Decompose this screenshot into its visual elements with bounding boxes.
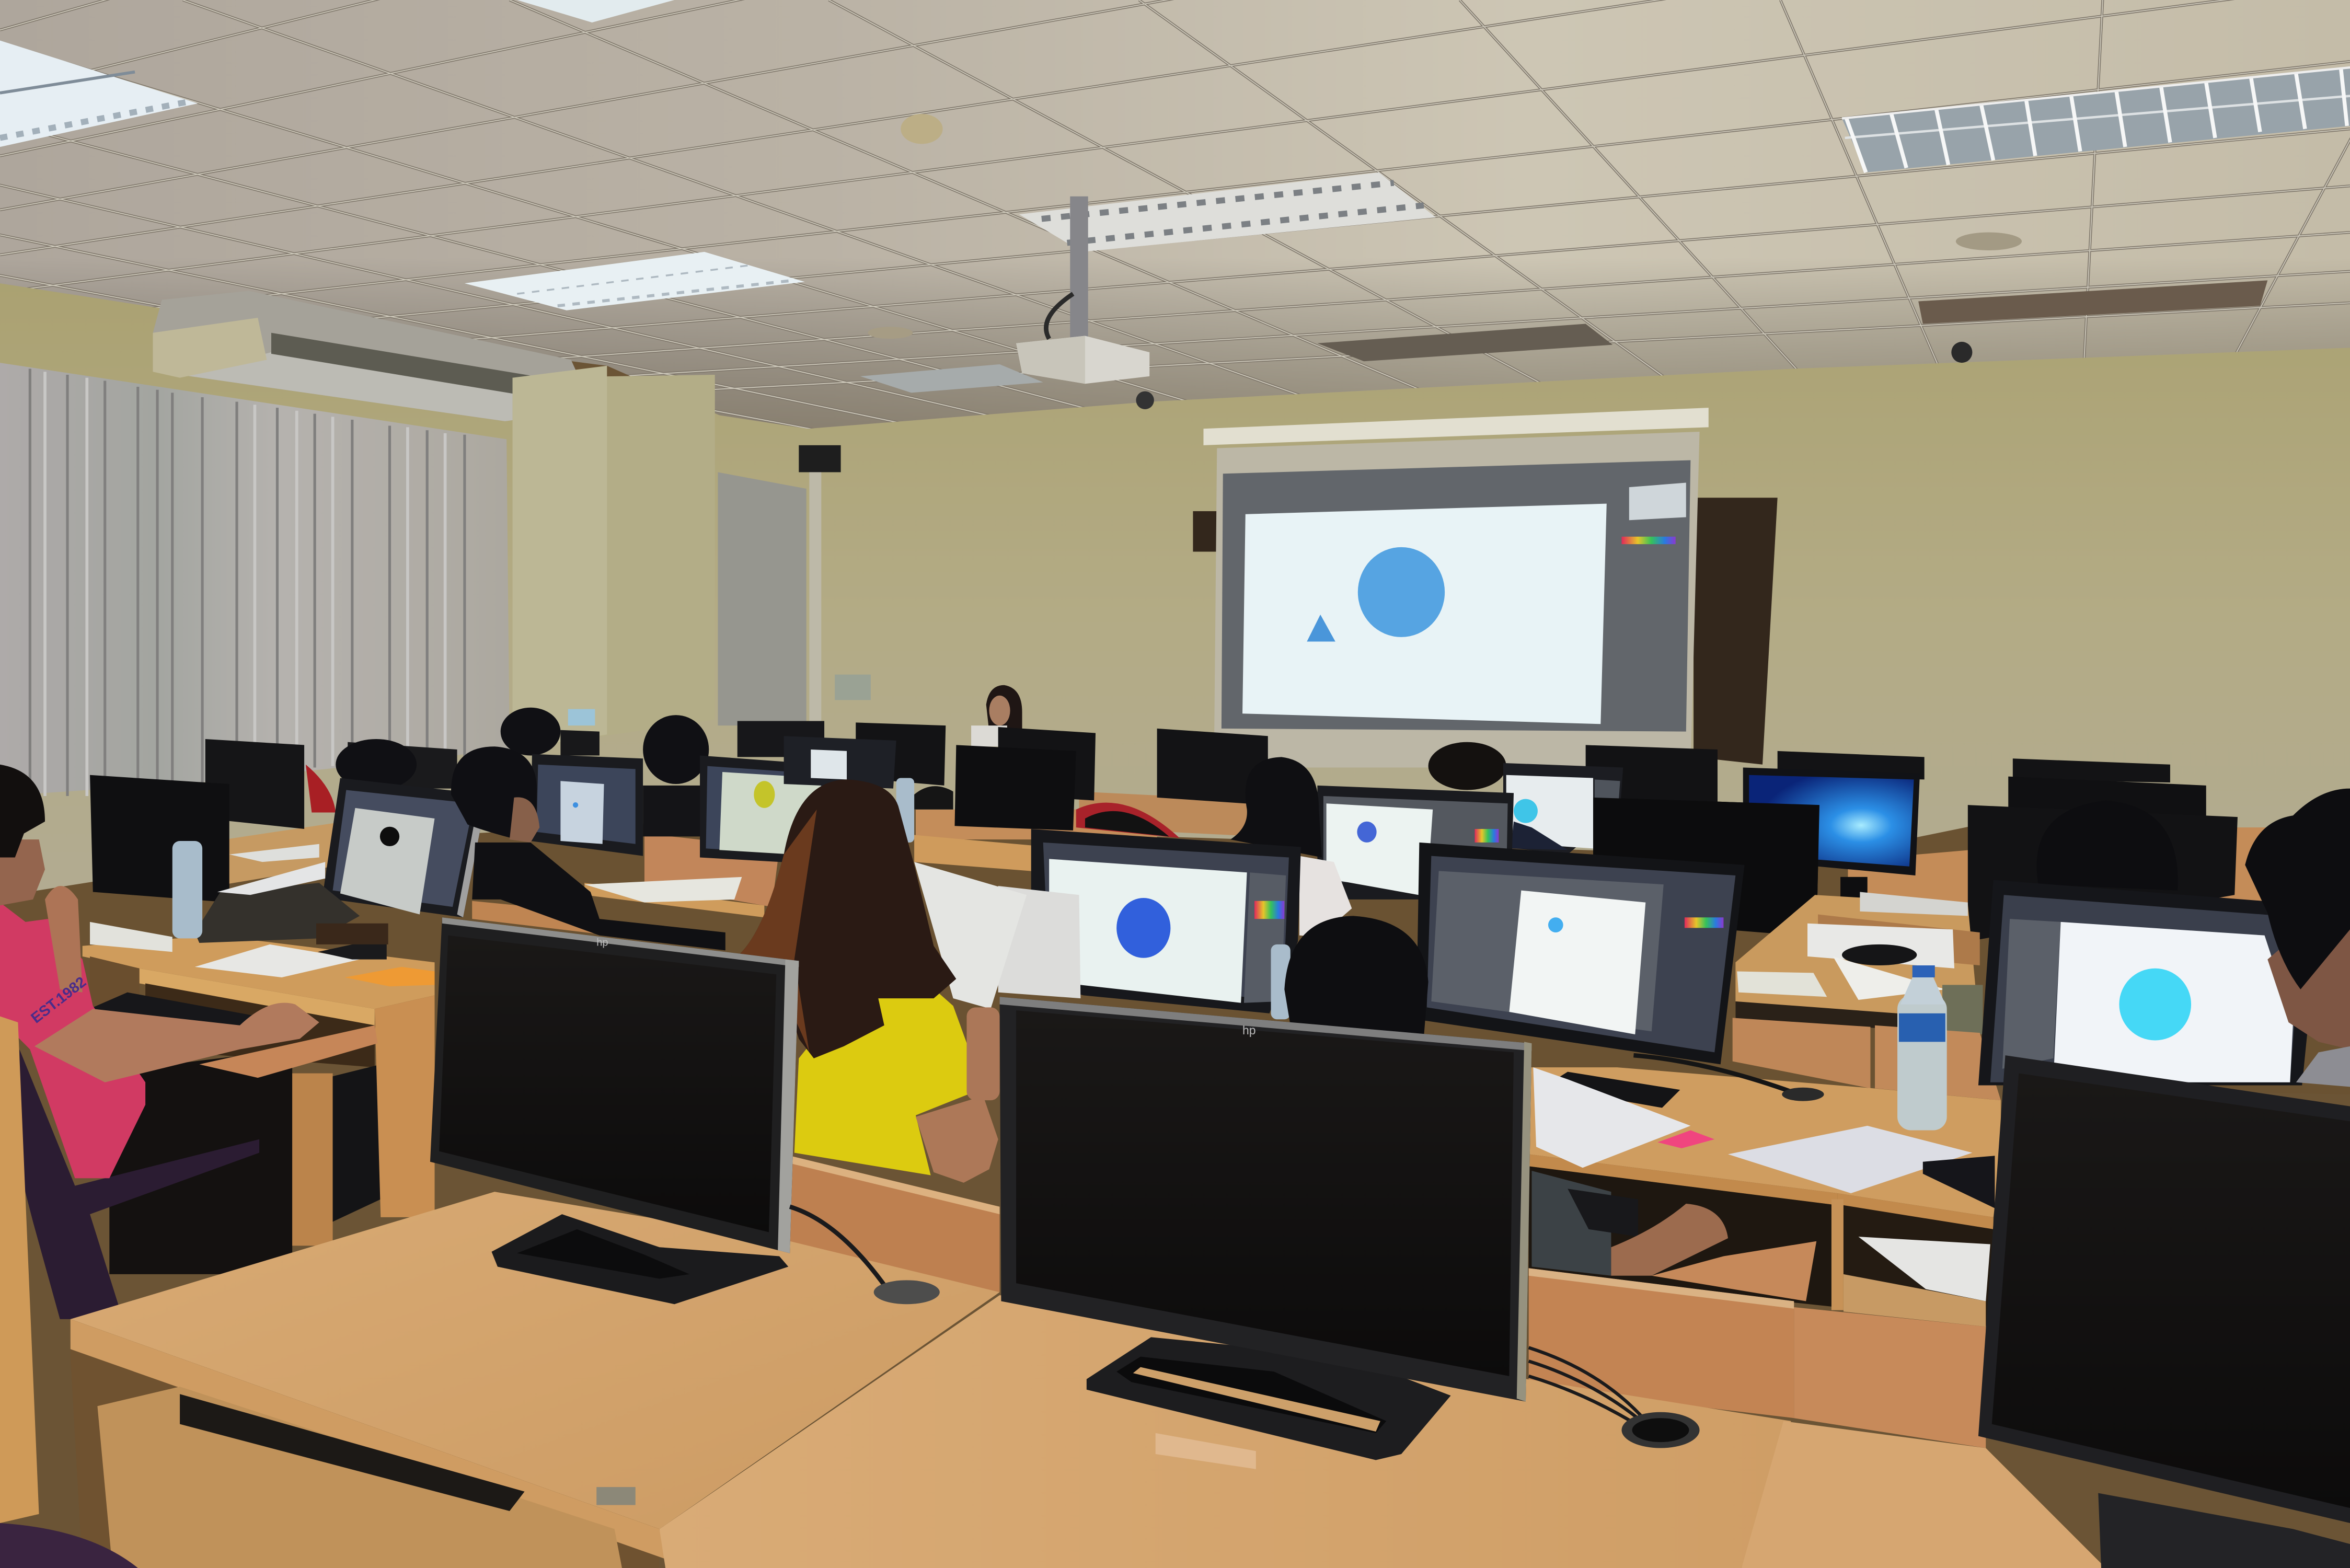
light: left centre <box>465 252 805 310</box>
light: far centre <box>1317 324 1612 361</box>
chair <box>19 1050 259 1319</box>
light: top left <box>0 40 198 147</box>
man in pink shirt <box>0 765 319 1319</box>
foreground chair edge <box>0 1523 138 1568</box>
right desk row far <box>1735 892 1983 1034</box>
open papers <box>914 862 1080 1009</box>
monitor: black dot <box>322 778 487 917</box>
panels behind right desk <box>1733 1018 2001 1100</box>
window blinds <box>0 363 510 796</box>
monitor: blue dot <box>1317 786 1514 900</box>
light: far right <box>1918 280 2267 324</box>
desk: right front <box>1742 1421 2106 1568</box>
ceiling fixtures <box>868 114 2022 409</box>
hair <box>740 779 956 1058</box>
left edge post <box>0 1017 39 1523</box>
sticky note on pillar <box>568 709 595 725</box>
person behind cyan monitor <box>2037 801 2178 891</box>
instructor <box>971 685 1022 746</box>
monitor: Windows desktop <box>1743 767 1920 898</box>
seated woman with bun and hand on keyboard <box>1284 916 1816 1301</box>
underside <box>1529 1166 1837 1307</box>
shirt <box>794 952 983 1175</box>
desk: centre front <box>660 1295 1791 1568</box>
arm <box>34 1003 319 1082</box>
man at far right <box>2245 789 2350 1087</box>
front centre monitor: hp <box>1242 1023 1256 1037</box>
stand <box>1087 1337 1451 1460</box>
jacket of man at front of white page <box>1511 822 1568 850</box>
monitor: small back <box>784 736 896 789</box>
woman in yellow shirt <box>740 779 1080 1183</box>
big dark monitor in front of Windows desktop <box>1593 798 1819 937</box>
front desks <box>71 1192 2106 1568</box>
wall sign <box>835 675 871 700</box>
papers <box>1533 1067 1690 1168</box>
back row monitors <box>90 721 2238 941</box>
back wall <box>0 270 2350 960</box>
light: far left <box>860 364 1043 393</box>
woman with ponytail and white shirt <box>1230 757 1352 937</box>
back vertical blinds <box>718 472 807 725</box>
bottle <box>172 841 202 938</box>
red chairs <box>306 765 1180 838</box>
back row furniture <box>0 791 2350 1094</box>
light: right <box>1842 67 2350 172</box>
cabinet behind screen <box>1694 498 1778 765</box>
monitor: white sheet small dot <box>1416 843 1745 1064</box>
hair <box>0 765 45 858</box>
air conditioner <box>153 291 586 421</box>
light: top centre <box>517 0 674 22</box>
projector <box>1016 197 1149 384</box>
middle-left row desks <box>83 883 764 1274</box>
monitor: large blue circle <box>1031 829 1301 1013</box>
monitor: light blue sheet <box>531 754 643 856</box>
front centre monitor <box>1000 997 1700 1460</box>
pillar <box>513 375 715 750</box>
right desk <box>1529 1055 2001 1327</box>
back row seated people <box>336 708 1506 836</box>
speaker <box>799 445 841 727</box>
face <box>0 839 45 905</box>
cables <box>1529 1347 1649 1430</box>
monitor: yellow circle <box>700 756 844 865</box>
desk items: left row <box>90 841 742 986</box>
water bottle right <box>1897 965 1947 1131</box>
wood box <box>316 924 388 944</box>
light: centre <box>1019 172 1436 252</box>
grommet <box>1621 1412 1700 1448</box>
person behind yellow monitor <box>643 715 709 836</box>
man in black jacket <box>451 746 725 950</box>
water bottle: back <box>896 778 914 843</box>
partition panels <box>790 1156 1986 1448</box>
hand <box>966 1007 1000 1100</box>
monitor: cyan circle <box>1978 880 2320 1085</box>
front left monitor <box>430 917 940 1304</box>
hand and forearm <box>45 886 83 993</box>
reflection on desk <box>1156 1433 1256 1469</box>
front left monitor: hp <box>596 937 608 949</box>
bag <box>195 883 360 943</box>
sleeve text: EST.1982 <box>28 974 89 1027</box>
ceiling lights <box>0 0 2350 393</box>
keyboard <box>1923 1156 1995 1208</box>
front right monitor <box>1978 1055 2350 1568</box>
ceiling <box>0 0 2350 429</box>
water bottle: middle <box>1271 944 1291 1019</box>
active monitors: middle rows <box>0 736 2350 1568</box>
shirt <box>0 903 145 1178</box>
desk: left front <box>71 1192 1000 1568</box>
arm <box>916 1096 998 1183</box>
monitor: white page <box>1503 763 1623 855</box>
monitor stand <box>1543 1072 1680 1108</box>
projector screen <box>1193 408 1778 767</box>
